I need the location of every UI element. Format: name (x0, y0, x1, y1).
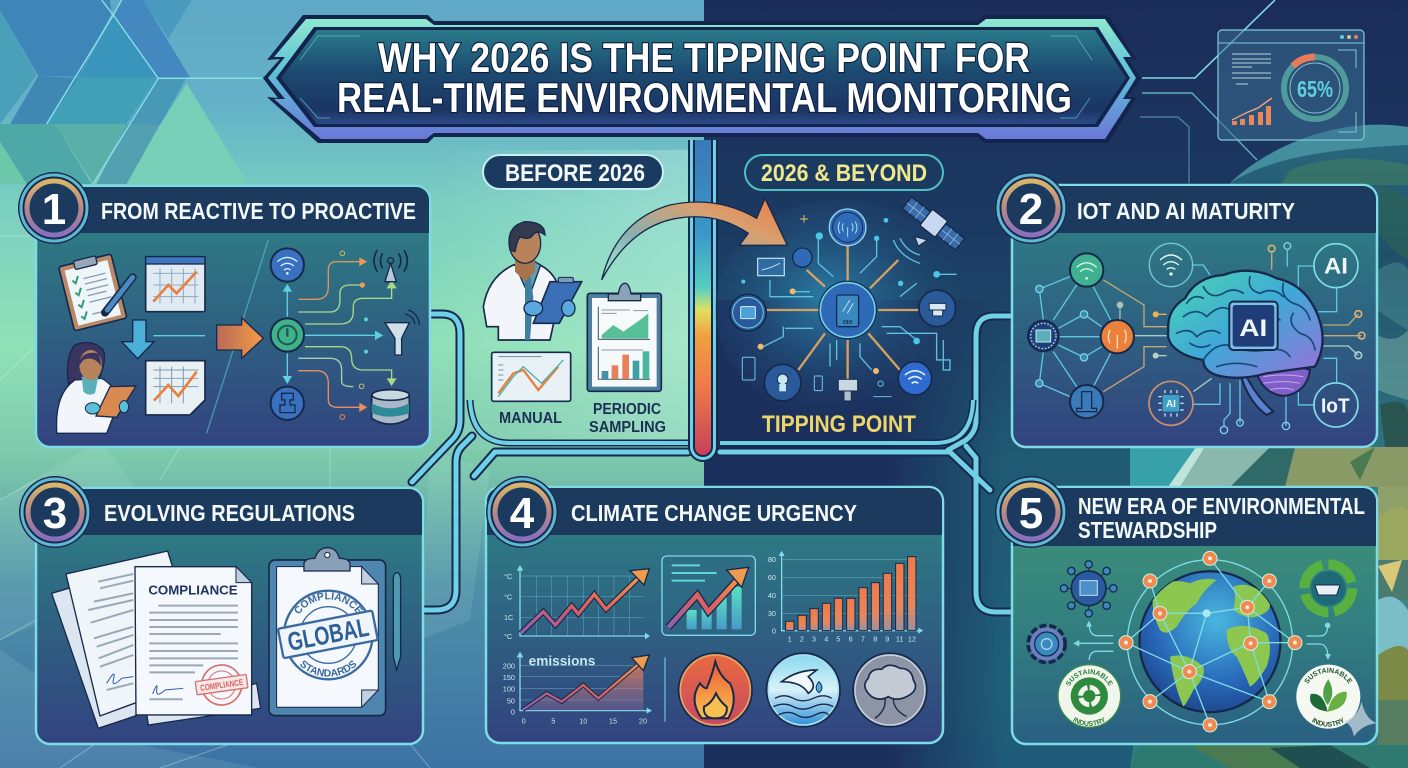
compliance documents illustration (51, 547, 402, 729)
node: green wifi (1070, 253, 1103, 287)
chart: monthly bars: 1 (788, 635, 792, 644)
label: IoT circle (1314, 383, 1358, 427)
pill: before 2026: BEFORE 2026 (505, 160, 645, 187)
AI and IoT network illustration (1028, 243, 1365, 434)
node: sensor (271, 387, 304, 420)
network links (1126, 558, 1295, 725)
seal: compliance: COMPLIANCE (199, 677, 244, 693)
title text: WHY 2026 IS THE TIPPING POINT FOR (378, 34, 1030, 81)
icon: clipboard with periodic charts (587, 283, 661, 391)
small arrows (1078, 625, 1328, 660)
chart: monthly bars: 30 (768, 609, 776, 618)
chart: emissions: 50 (507, 696, 515, 705)
arrow: reactive to proactive (217, 318, 263, 358)
center panel: 2026 and beyond (715, 155, 973, 443)
panel 4 header (487, 488, 942, 535)
label: AI circle (1314, 244, 1358, 288)
badge 2: 2 (1019, 185, 1043, 234)
icon: sea level rise (766, 652, 841, 728)
badge 4 (486, 476, 558, 548)
icon: storm cloud (852, 652, 928, 728)
chart: monthly bars: 4 (824, 635, 828, 644)
badge: sustainable industry recycling: INDUSTRY (1072, 716, 1104, 726)
label: periodic sampling: SAMPLING (589, 419, 666, 436)
badge: sustainable industry leaf: INDUSTRY (1312, 718, 1344, 727)
chart: emissions: 10 (579, 716, 587, 725)
background: earth from orbit (1130, 125, 1408, 768)
heading 1: FROM REACTIVE TO PROACTIVE (101, 198, 416, 224)
arrow: down (122, 320, 154, 359)
icon: wifi circle (1149, 243, 1193, 287)
chart: temperature: °C (504, 572, 513, 581)
chart: emissions: 5 (551, 716, 555, 725)
connector lines to dashboard (1140, 0, 1275, 183)
chart: monthly bars: 80 (768, 555, 776, 564)
icon: gear (1029, 627, 1064, 661)
chart: emissions: 0 (522, 716, 526, 725)
chart: temperature: 1C (504, 613, 514, 622)
chart: monthly bars: 40 (768, 591, 776, 600)
icon: calendar chart (146, 257, 205, 312)
badge 3 (19, 476, 91, 548)
icon: green recycling loop (1304, 564, 1352, 612)
panel 3: evolving regulations (19, 476, 424, 746)
icon: AI brain (1168, 271, 1323, 415)
network of sensors with hub (730, 209, 957, 401)
panel 5: new era of environmental stewardship (995, 476, 1378, 746)
chart: monthly bars: 11 (896, 635, 903, 644)
chart: temperature: °C (504, 592, 513, 601)
icon: manual line chart (492, 352, 571, 401)
center panel: before 2026 (470, 155, 688, 443)
icon: female scientist (57, 343, 136, 433)
chart: monthly bars: 60 (768, 573, 776, 582)
network of sensors with hub: OIO (843, 320, 853, 326)
reactive workflow illustration (57, 240, 419, 433)
chart: monthly bars (768, 551, 923, 644)
compliance document: COMPLIANCE (148, 582, 238, 597)
chart: monthly bars: 7 (861, 635, 865, 644)
globe (1131, 564, 1290, 718)
dashboard widget with 65% gauge: 65% (1297, 76, 1333, 102)
chart: emissions: 200 (503, 661, 515, 670)
stamp: global standards: STANDARDS (300, 660, 356, 677)
sparkle (1343, 702, 1377, 737)
chart: monthly bars: 2 (800, 635, 804, 644)
badge 3: 3 (43, 489, 67, 538)
connected globe illustration (1026, 550, 1376, 736)
title text (337, 34, 1072, 121)
stamp: global standards: COMPLIANCE (294, 592, 363, 614)
panel 1: from reactive to proactive (18, 172, 430, 447)
dashboard widget with 65% gauge (1218, 30, 1364, 140)
title banner (263, 15, 1141, 143)
center timeline stem (688, 140, 718, 462)
compliance document (135, 567, 252, 715)
heading 3: EVOLVING REGULATIONS (104, 500, 355, 526)
stacked papers (52, 551, 261, 728)
chart: emissions (503, 652, 652, 725)
chart: monthly bars: 6 (849, 635, 853, 644)
icon: paper chart (146, 361, 205, 415)
panel 2 header (1013, 186, 1376, 233)
clipboard with global stamp (268, 547, 402, 716)
label: periodic sampling: PERIODIC (593, 401, 661, 418)
heading 2: IOT AND AI MATURITY (1077, 198, 1295, 224)
chart: monthly bars: 8 (873, 635, 877, 644)
stamp: global standards (277, 590, 379, 680)
chart: temperature: °C (504, 632, 513, 641)
chart: emissions: emissions (529, 652, 596, 668)
chart: monthly bars: 0 (772, 626, 776, 635)
stamp: global standards: GLOBAL (285, 612, 371, 657)
badge 2 (995, 172, 1067, 244)
badge: sustainable industry recycling: SUSTAINABLE (1066, 669, 1113, 686)
icon: pen (105, 277, 133, 313)
icon: pen (393, 573, 401, 670)
badge 5 (995, 476, 1067, 548)
connector pipes (412, 314, 1012, 612)
label: manual: MANUAL (499, 410, 562, 427)
arrow: before to beyond (602, 198, 787, 280)
label: periodic sampling (589, 401, 666, 436)
node: orange signal (1101, 320, 1134, 353)
icon: water sensor (385, 310, 419, 355)
orbit ring (1127, 560, 1293, 725)
chart: rising trend card (662, 556, 755, 635)
icon: wildfire (678, 652, 753, 728)
icon: database (372, 390, 409, 424)
chart: emissions: 20 (639, 716, 647, 725)
node: chip (1028, 321, 1059, 351)
panel 3 header (37, 489, 422, 535)
chart: monthly bars: 12 (908, 635, 916, 644)
chart: monthly bars: 5 (836, 635, 840, 644)
chart: temperature (504, 565, 650, 641)
icon: chip network (1060, 561, 1117, 617)
icon: AI chip circle (1149, 381, 1193, 425)
icon: male scientist with clipboard (483, 222, 582, 340)
badge 5: 5 (1019, 489, 1043, 538)
AI chip on brain (1229, 302, 1278, 350)
badge: sustainable industry recycling (1057, 664, 1122, 728)
title text: REAL-TIME ENVIRONMENTAL MONITORING (337, 74, 1072, 121)
badge 4: 4 (510, 489, 535, 538)
chart: monthly bars: 9 (885, 635, 889, 644)
icon: satellite (901, 194, 967, 252)
label: IoT circle: IoT (1321, 395, 1350, 417)
divider (207, 240, 268, 433)
AI chip on brain: AI (1239, 315, 1267, 342)
badge 1 (18, 172, 90, 244)
badge 1: 1 (42, 185, 66, 234)
heading 4: CLIMATE CHANGE URGENCY (571, 500, 857, 526)
icon: checklist clipboard (58, 252, 127, 331)
panel 1 header (37, 187, 429, 233)
node: wifi (271, 248, 304, 282)
chart: emissions: 150 (503, 673, 515, 682)
heading 5: STEWARDSHIP (1078, 517, 1217, 543)
panel 2: IoT and AI maturity (995, 172, 1377, 447)
pill: 2026 and beyond (745, 155, 943, 190)
climate charts and hazard icons (503, 551, 928, 728)
node: sensor (1070, 385, 1103, 418)
chart: monthly bars: 3 (812, 635, 816, 644)
badge: sustainable industry leaf: SUSTAINABLE (1304, 668, 1352, 684)
heading 5 (1078, 493, 1365, 543)
label: AI circle: AI (1324, 254, 1348, 279)
network lines (1039, 250, 1337, 427)
panel 5 header (1013, 488, 1376, 546)
icon: radio tower (374, 250, 407, 282)
chart: emissions: 0 (511, 707, 515, 716)
node: power hub (271, 318, 304, 352)
chart: emissions: 100 (503, 685, 515, 694)
chart: emissions: 15 (609, 716, 617, 725)
label: tipping point: TIPPING POINT (762, 411, 916, 438)
pill: 2026 and beyond: 2026 & BEYOND (761, 160, 927, 187)
icon: AI chip circle: AI (1166, 399, 1176, 410)
badge: sustainable industry leaf (1296, 664, 1360, 729)
seal: compliance (193, 662, 250, 708)
panel 4: climate change urgency (486, 476, 943, 743)
pill: before 2026 (483, 155, 663, 189)
orbit nodes (1119, 551, 1302, 732)
data flow lines (287, 262, 392, 407)
